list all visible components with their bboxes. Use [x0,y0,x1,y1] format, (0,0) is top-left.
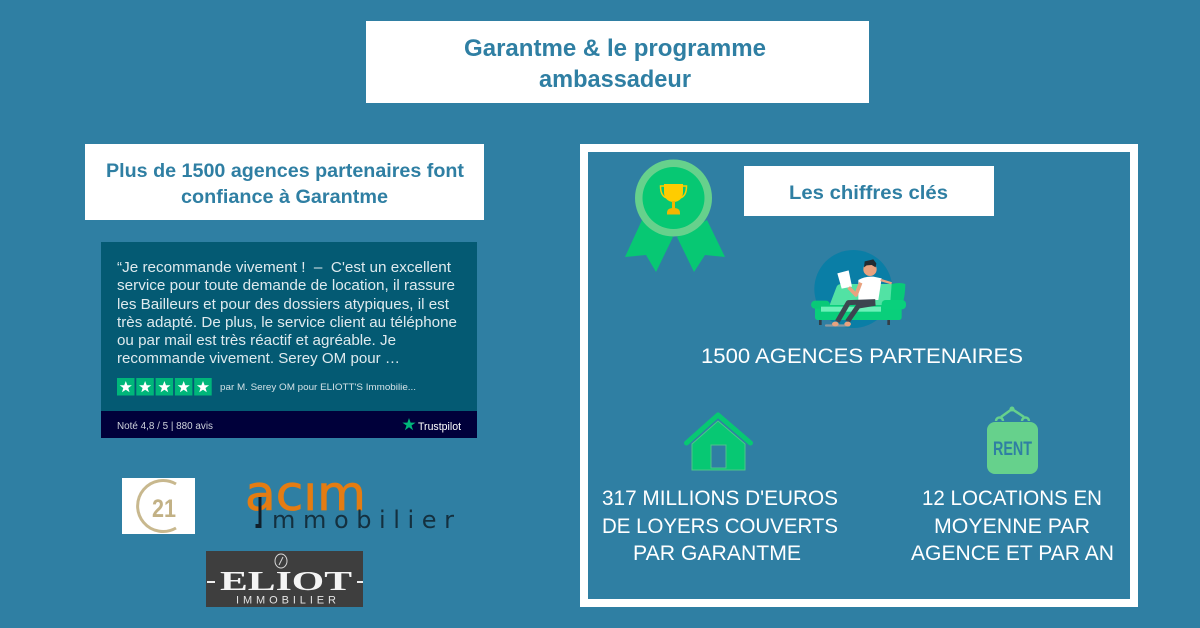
rating summary: Noté 4,8 / 5 | 880 avis [117,421,213,432]
title [366,21,869,103]
review quote: les Bailleurs et pour des dossiers atypiques, il est [117,297,449,313]
review quote: “Je recommande vivement ! – C'est un excellent [117,260,451,276]
icon: rent sign: RENT [993,439,1032,460]
figure: rentals per agency: AGENCE ET PAR AN [911,542,1114,565]
figure: rents covered: DE LOYERS COUVERTS [602,515,838,538]
logo: Acim Immobilier: mmobilier [272,506,454,534]
heading: partner agencies: Plus de 1500 agences partenaires font [106,160,465,182]
figure: rentals per agency [911,487,1114,565]
logo: Century 21 [122,478,195,534]
logo: Eliot Immobilier: ELIOT [220,566,352,596]
review author: par M. Serey OM pour ELIOTT'S Immobilie... [220,382,416,392]
title: Garantme & le programme [464,35,766,62]
review quote: service pour toute demande de location, il rassure [117,278,455,294]
figure: rents covered [602,487,838,565]
panel: key figures [584,148,1134,603]
figure: rents covered: PAR GARANTME [633,542,801,565]
five star rating [117,378,212,396]
icon: man reading on sofa [811,250,906,328]
icon: award ribbon with trophy [625,160,725,272]
figure: partner agencies: 1500 AGENCES PARTENAIRES [701,345,1023,368]
heading: partner agencies [85,144,484,220]
figure: rentals per agency: MOYENNE PAR [934,515,1090,538]
Trustpilot logo [402,418,461,433]
icon: house [686,415,750,470]
icon: rent sign [987,406,1038,474]
logo: Eliot Immobilier: IMMOBILIER [236,594,336,606]
review quote: recommande vivement. Serey OM pour … [117,351,400,367]
logo: Acim Immobilier [245,466,454,534]
review quote: ou par mail est très réactif et agréable. Je [117,333,396,349]
panel: Trustpilot review card [101,242,477,438]
heading: partner agencies: confiance à Garantme [181,186,388,208]
logo: Acim Immobilier: acım [245,466,366,522]
figure: rentals per agency: 12 LOCATIONS EN [922,487,1102,510]
heading: key figures [744,166,994,216]
review quote [117,260,457,367]
heading: key figures: Les chiffres clés [789,182,948,204]
review quote: très adapté. De plus, le service client au téléphone [117,315,457,331]
logo: Century 21: 21 [152,495,176,523]
figure: rents covered: 317 MILLIONS D'EUROS [602,487,838,510]
logo: Eliot Immobilier [206,551,363,607]
title: ambassadeur [539,66,691,93]
Trustpilot logo: Trustpilot [418,421,461,433]
